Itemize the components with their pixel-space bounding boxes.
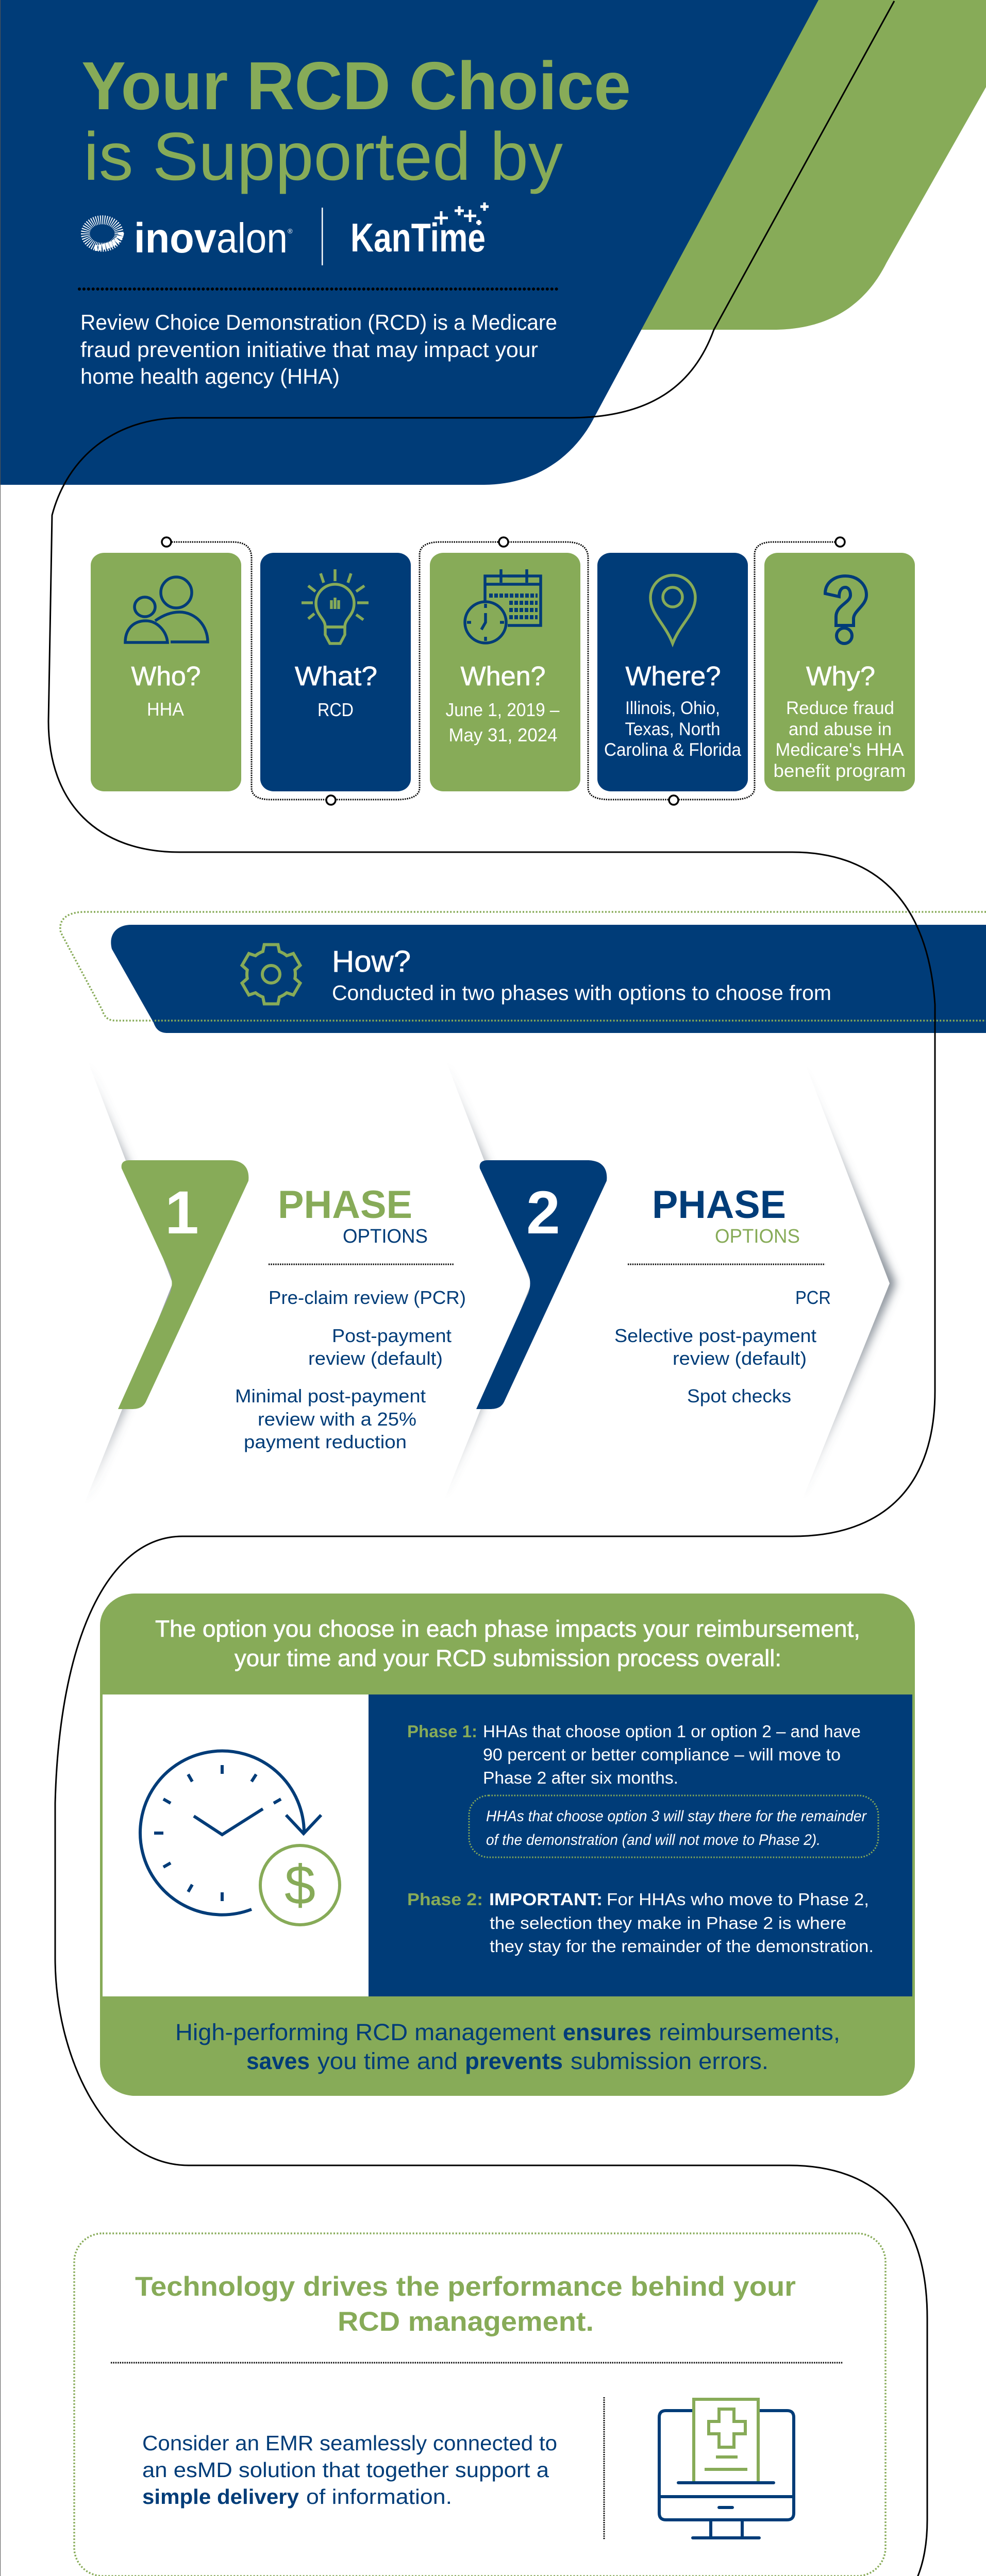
phase 2: PHASE: [652, 1183, 786, 1227]
phase 2: OPTIONS: [715, 1226, 800, 1247]
phase 2 note: they stay for the remainder of the demonstration.: [490, 1937, 874, 1956]
option 3 callout: of the demonstration (and will not move to Phase 2).: [486, 1832, 821, 1849]
panel: How: How?: [332, 945, 411, 978]
card: Where: Where?: [626, 662, 721, 691]
logo: Inovalon: inov: [134, 215, 216, 262]
card: What: [260, 553, 411, 791]
heading: The option you choose in each phase impacts your reimbursement,: [155, 1616, 860, 1642]
closing statement: you time and: [317, 2048, 458, 2074]
header background: navy panel: [0, 0, 818, 485]
phase 1: review with a 25%: [258, 1409, 416, 1430]
card: Who: HHA: [147, 699, 184, 720]
card: When: When?: [461, 662, 545, 691]
panel: reimbursement impact: [100, 1594, 915, 2096]
option 3 callout: HHAs that choose option 3 will stay there for the remainder: [486, 1808, 867, 1825]
phase 1: [118, 1160, 466, 1452]
phase 1: review (default): [308, 1348, 443, 1369]
intro paragraph: fraud prevention initiative that may impact your: [80, 337, 538, 362]
phase 1 note: 90 percent or better compliance – will move to: [483, 1745, 841, 1764]
heading: RCD management.: [338, 2307, 594, 2337]
card: Where: Illinois, Ohio,: [625, 698, 720, 718]
phase 2: 2: [526, 1179, 560, 1247]
closing statement: prevents: [465, 2048, 563, 2074]
option 3 callout: [469, 1795, 878, 1857]
card: Why: Medicare's HHA: [775, 740, 904, 760]
panel: How: Conducted in two phases with options to choose from: [332, 981, 831, 1005]
title: [81, 48, 631, 194]
card: What: RCD: [317, 699, 354, 720]
phase 1: OPTIONS: [343, 1226, 428, 1247]
header dotted divider: [79, 287, 558, 291]
logo: KanTime: [350, 202, 489, 260]
header background: green ribbon: [619, 0, 986, 330]
phase 2: PCR: [795, 1287, 831, 1308]
icon: clock with dollar coin: [140, 1751, 340, 1925]
card: When: June 1, 2019 –: [445, 699, 560, 720]
intro paragraph: home health agency (HHA): [80, 364, 340, 388]
phase 1: Post-payment: [332, 1325, 452, 1346]
phase 2: [476, 1160, 831, 1409]
panel: technology: [74, 2233, 885, 2576]
card: Why: benefit program: [773, 761, 906, 781]
icon: monitor with medical document: [659, 2399, 794, 2538]
card: Where: Carolina & Florida: [604, 740, 742, 760]
intro paragraph: [80, 310, 557, 388]
icon: question mark: [825, 576, 866, 643]
icon: clock with dollar coin: $: [285, 1854, 315, 1916]
phase 2 note: IMPORTANT:: [489, 1890, 603, 1909]
closing statement: saves: [246, 2048, 310, 2074]
card: What: What?: [295, 662, 377, 691]
phase 1: payment reduction: [244, 1431, 407, 1452]
card: Where: [597, 553, 748, 791]
phase 1 note: HHAs that choose option 1 or option 2 – and have: [483, 1722, 861, 1741]
heading: [135, 2272, 796, 2337]
dotted connectors around cards: [162, 537, 845, 805]
phase 2: review (default): [673, 1348, 807, 1369]
logo: Inovalon: ®: [288, 227, 293, 235]
phase chevron shadows: [31, 1046, 890, 1510]
card: Why: Why?: [806, 662, 875, 691]
heading: your time and your RCD submission process overall:: [235, 1645, 781, 1671]
card: When: [430, 553, 580, 791]
body text: of information.: [306, 2485, 452, 2509]
icon: gear: [239, 945, 303, 1004]
phase 1 note: Phase 2 after six months.: [483, 1768, 678, 1787]
body text: an esMD solution that together support a: [142, 2458, 549, 2482]
logo: Inovalon: [86, 215, 293, 262]
phase 2 note: [407, 1890, 874, 1956]
navy number tab: [476, 1160, 607, 1409]
closing statement: High-performing RCD management: [175, 2019, 556, 2045]
icon: calendar and clock: [465, 569, 541, 643]
logo: KanTime: KanTime: [350, 215, 486, 260]
phase 1 note: [407, 1722, 861, 1787]
icon: light bulb: [302, 569, 369, 643]
body text: Consider an EMR seamlessly connected to: [142, 2431, 557, 2455]
panel: How: [60, 912, 986, 1033]
icon: people: [125, 577, 208, 642]
intro paragraph: Review Choice Demonstration (RCD) is a Medicare: [80, 310, 557, 334]
card: Why: [764, 553, 915, 791]
phase 2: Selective post-payment: [614, 1325, 816, 1346]
heading: [155, 1616, 860, 1671]
title: Your RCD Choice: [81, 48, 631, 124]
phase 1: Minimal post-payment: [235, 1385, 426, 1406]
logo divider: [322, 208, 323, 265]
phase 1: PHASE: [278, 1183, 412, 1227]
closing statement: ensures: [563, 2019, 651, 2045]
body text: [142, 2431, 557, 2509]
icon: map pin: [650, 575, 695, 643]
phase 1: 1: [165, 1179, 199, 1247]
closing statement: submission errors.: [571, 2048, 768, 2074]
card: Where: Texas, North: [625, 719, 721, 739]
card: Why: Reduce fraud: [786, 698, 894, 718]
heading: Technology drives the performance behind your: [135, 2272, 796, 2302]
card: Who: Who?: [131, 662, 201, 691]
logo: Inovalon: alon: [216, 215, 288, 262]
phase 2: Spot checks: [687, 1385, 791, 1406]
phase 1: Pre-claim review (PCR): [269, 1287, 466, 1308]
card: Who: [91, 553, 241, 791]
card: When: May 31, 2024: [448, 724, 558, 745]
title: is Supported by: [83, 118, 563, 194]
closing statement: [175, 2019, 840, 2074]
phase 1 note: Phase 1:: [407, 1722, 477, 1741]
phase 2 note: the selection they make in Phase 2 is where: [490, 1913, 846, 1933]
phase 2 note: For HHAs who move to Phase 2,: [607, 1890, 869, 1909]
phase 2 note: Phase 2:: [407, 1890, 483, 1909]
closing statement: reimbursements,: [659, 2019, 840, 2045]
green number tab: [118, 1160, 248, 1409]
body text: simple delivery: [142, 2485, 299, 2509]
card: Why: and abuse in: [789, 719, 892, 739]
